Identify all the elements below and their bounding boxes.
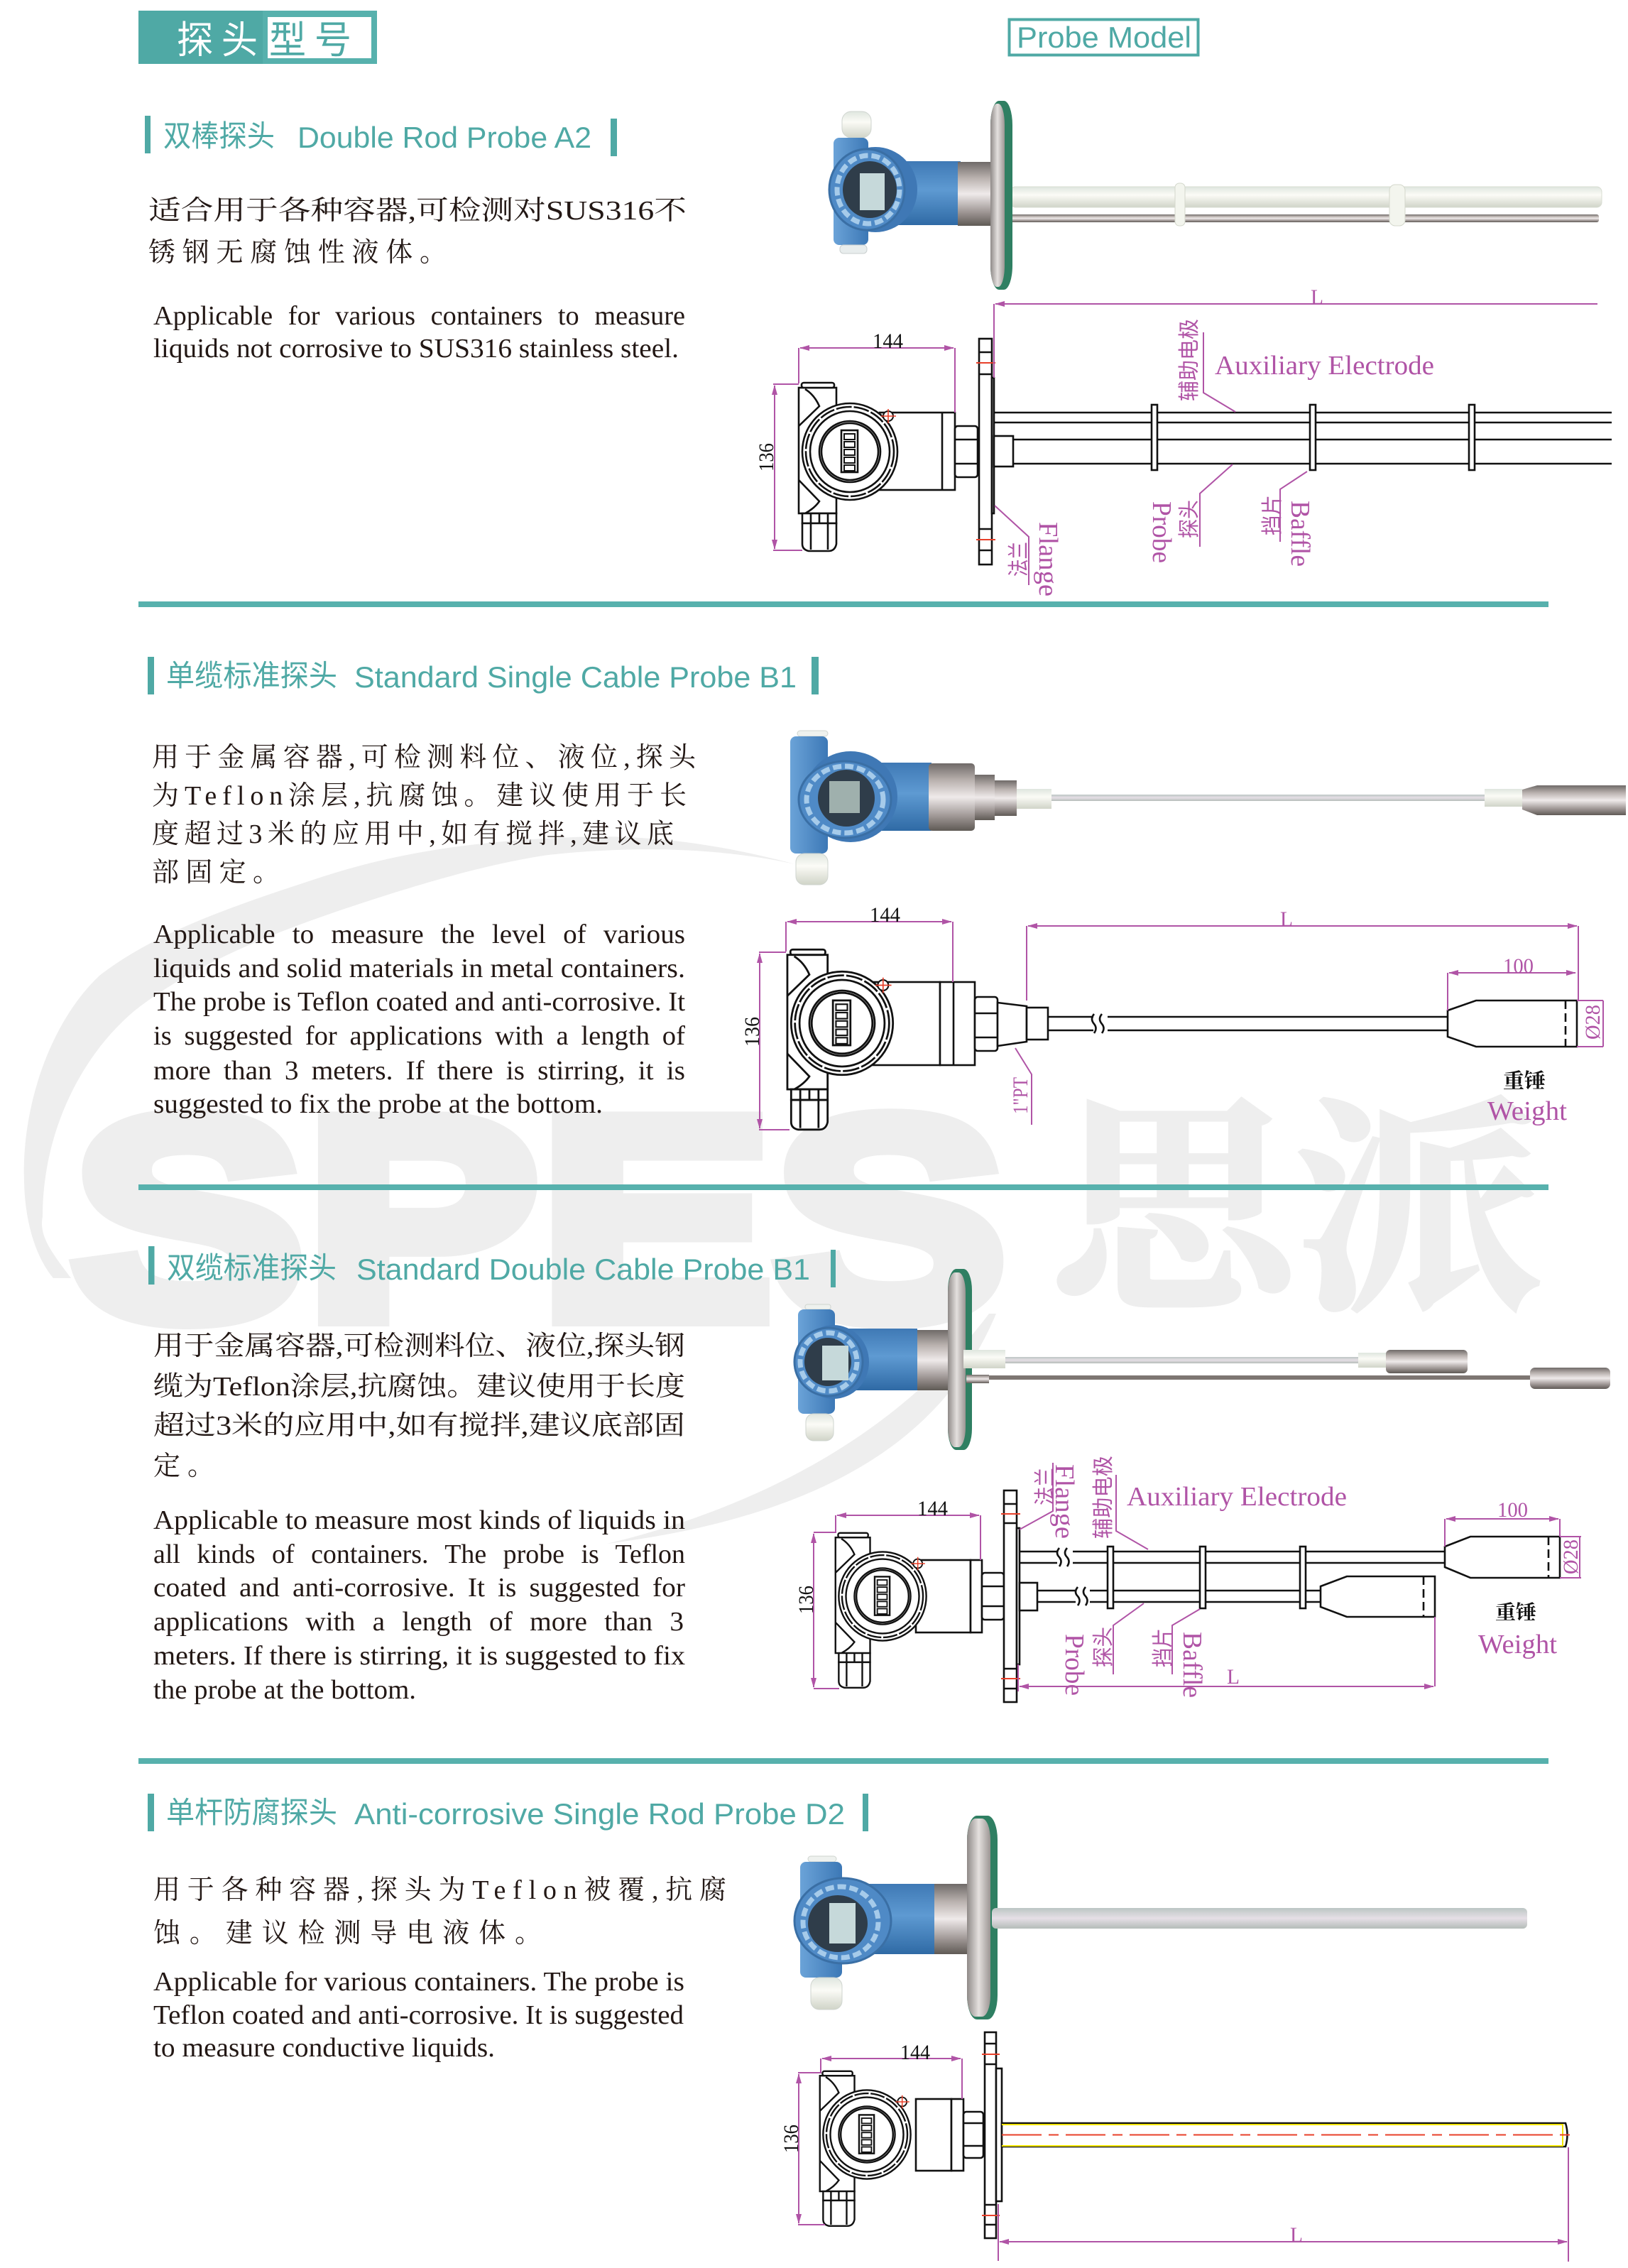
callouts double cable: Flange — [1049, 1464, 1079, 1539]
chinese description single cable: 度超过3米的应用中,如有搅拌,建议底 — [152, 819, 674, 849]
chinese description double cable: 用于金属容器,可检测料位、液位,探头钢 — [153, 1331, 685, 1361]
page heading: 探头型号 — [138, 9, 377, 65]
english description double cable — [153, 1505, 685, 1705]
technical drawing double cable — [794, 1456, 1583, 1702]
section title D2 — [148, 1794, 868, 1831]
dimensions A2 — [755, 285, 1597, 550]
technical drawing D2 — [780, 2032, 1574, 2262]
chinese description A2: 适合用于各种容器,可检测对SUS316不 — [148, 196, 687, 226]
product photo A2 — [829, 101, 1602, 290]
section title single cable: Standard Single Cable Probe B1 — [354, 660, 797, 694]
panel: double rod probe A2 — [145, 101, 1612, 596]
callouts single cable — [1009, 1048, 1567, 1126]
chinese description A2 — [148, 196, 687, 268]
chinese description D2: 蚀。建议检测导电液体。 — [153, 1919, 542, 1948]
dimensions A2: L — [1311, 285, 1323, 309]
english description single cable: liquids and solid materials in metal containers. — [153, 954, 685, 983]
chinese description D2: 用于各种容器,探头为Teflon被覆,抗腐 — [153, 1875, 726, 1905]
english description double cable: meters. If there is stirring, it is suggested to fix — [153, 1641, 685, 1671]
chinese description single cable: 为Teflon涂层,抗腐蚀。建议使用于长 — [152, 781, 687, 811]
section title double cable: 双缆标准探头 — [167, 1251, 337, 1285]
english description single cable: Applicable to measure the level of various — [153, 920, 685, 949]
english description single cable: is suggested for applications with a length of — [153, 1021, 685, 1051]
callouts A2: Probe — [1147, 501, 1176, 563]
english description double cable: applications with a length of more than 3 — [153, 1607, 684, 1637]
callouts double cable: 挡片 — [1145, 1628, 1176, 1667]
dimensions double cable: L — [1227, 1665, 1240, 1689]
page heading: 探头型号: 型 号 — [269, 9, 351, 65]
section title D2: Anti-corrosive Single Rod Probe D2 — [354, 1797, 845, 1831]
technical drawing A2 — [755, 285, 1612, 596]
chinese description double cable: 定。 — [153, 1451, 214, 1481]
panel: anti-corrosive single rod probe D2 — [148, 1794, 1574, 2262]
callouts double cable: 辅助电极 — [1086, 1456, 1117, 1539]
english page heading: Probe Model: Probe Model — [1017, 21, 1191, 54]
dimensions double cable: 136 — [794, 1586, 818, 1614]
callouts double cable: 重锤 — [1495, 1597, 1536, 1625]
technical drawing single cable — [741, 903, 1605, 1130]
callouts double cable: Probe — [1059, 1634, 1089, 1696]
callouts double cable — [1020, 1456, 1557, 1698]
watermark: SPES logo: 思派 — [1051, 1028, 1541, 1355]
dimensions double cable: 100 — [1497, 1498, 1528, 1522]
chinese description double cable: 超过3米的应用中,如有搅拌,建议底部固 — [153, 1411, 685, 1441]
dimensions single cable: 136 — [741, 1017, 764, 1047]
english description A2: Applicable for various containers to measure — [153, 301, 685, 331]
english description double cable: the probe at the bottom. — [153, 1675, 416, 1705]
chinese description double cable: 缆为Teflon涂层,抗腐蚀。建议使用于长度 — [153, 1372, 685, 1402]
english description double cable: coated and anti-corrosive. It is suggested for — [153, 1573, 685, 1603]
callouts A2: Auxiliary Electrode — [1215, 351, 1434, 381]
chinese description single cable: 部固定。 — [152, 858, 280, 888]
product photo D2 — [794, 1816, 1527, 2019]
english description D2: Teflon coated and anti-corrosive. It is suggested — [153, 2000, 684, 2030]
callouts A2: Flange — [1033, 522, 1063, 596]
watermark: SPES logo — [24, 836, 1541, 1544]
callouts double cable: 法兰 — [1027, 1468, 1059, 1505]
watermark: SPES logo: SPES — [71, 1057, 1007, 1379]
dimensions single cable: 144 — [870, 903, 900, 927]
english description single cable — [153, 920, 685, 1119]
dimensions D2: 136 — [780, 2125, 803, 2153]
callouts double cable: 探头 — [1086, 1627, 1117, 1667]
callouts A2: 辅助电极 — [1171, 319, 1203, 401]
dimensions double cable: 144 — [917, 1497, 948, 1520]
callouts A2: 挡片 — [1255, 495, 1286, 535]
panel: standard single cable probe B1 — [148, 657, 1626, 1130]
dimensions single cable — [741, 903, 1605, 1130]
product photo double cable — [794, 1269, 1610, 1450]
product photo single cable — [790, 731, 1626, 885]
dimensions A2: 144 — [873, 329, 903, 353]
callouts double cable: Auxiliary Electrode — [1127, 1482, 1347, 1512]
dimensions double cable: Ø28 — [1559, 1539, 1583, 1574]
english description D2: Applicable for various containers. The probe is — [153, 1967, 684, 1997]
section title A2 — [145, 116, 617, 156]
english description double cable: Applicable to measure most kinds of liquids in — [153, 1505, 685, 1535]
chinese description D2 — [153, 1875, 726, 1948]
dimensions single cable: Ø28 — [1581, 1005, 1605, 1040]
section title single cable: 单缆标准探头 — [166, 659, 337, 692]
section title double cable: Standard Double Cable Probe B1 — [356, 1253, 810, 1286]
dimensions A2: 136 — [755, 443, 778, 471]
english description single cable: suggested to fix the probe at the bottom. — [153, 1089, 603, 1119]
dimensions single cable: 100 — [1503, 954, 1534, 978]
callouts A2 — [995, 319, 1434, 596]
dimensions D2 — [780, 2041, 1568, 2262]
dimensions D2: 144 — [900, 2041, 930, 2064]
english description A2: liquids not corrosive to SUS316 stainless steel. — [153, 334, 679, 364]
section title D2: 单杆防腐探头 — [166, 1796, 337, 1829]
english description A2 — [153, 301, 685, 364]
english description single cable: more than 3 meters. If there is stirring, it is — [153, 1056, 685, 1086]
callouts single cable: Weight — [1487, 1096, 1567, 1126]
callouts A2: Baffle — [1285, 501, 1315, 567]
callouts A2: 法兰 — [1001, 542, 1032, 577]
callouts single cable: 重锤 — [1503, 1065, 1546, 1094]
section title A2: 双棒探头 — [163, 119, 275, 153]
chinese description A2: 锈钢无腐蚀性液体。 — [148, 238, 447, 268]
dimensions single cable: L — [1280, 907, 1293, 931]
dimensions double cable — [794, 1497, 1583, 1691]
section title single cable — [148, 657, 819, 694]
english description D2: to measure conductive liquids. — [153, 2033, 495, 2063]
english description single cable: The probe is Teflon coated and anti-corrosive. It — [153, 987, 685, 1017]
callouts single cable: 1"PT — [1009, 1077, 1032, 1114]
english description D2 — [153, 1967, 684, 2063]
callouts double cable: Weight — [1478, 1630, 1557, 1659]
chinese description single cable — [152, 743, 696, 888]
chinese description single cable: 用于金属容器,可检测料位、液位,探头 — [152, 743, 696, 773]
page heading: 探头型号: 探 头 — [177, 9, 258, 65]
panel: standard double cable probe B1 — [148, 1246, 1610, 1705]
callouts double cable: Baffle — [1177, 1632, 1207, 1698]
section title double cable — [148, 1246, 836, 1287]
chinese description double cable — [153, 1331, 685, 1481]
section title A2: Double Rod Probe A2 — [297, 121, 591, 154]
callouts A2: 探头 — [1171, 500, 1203, 538]
dimensions D2: L — [1290, 2223, 1303, 2247]
english description double cable: all kinds of containers. The probe is Teflon — [153, 1539, 685, 1569]
